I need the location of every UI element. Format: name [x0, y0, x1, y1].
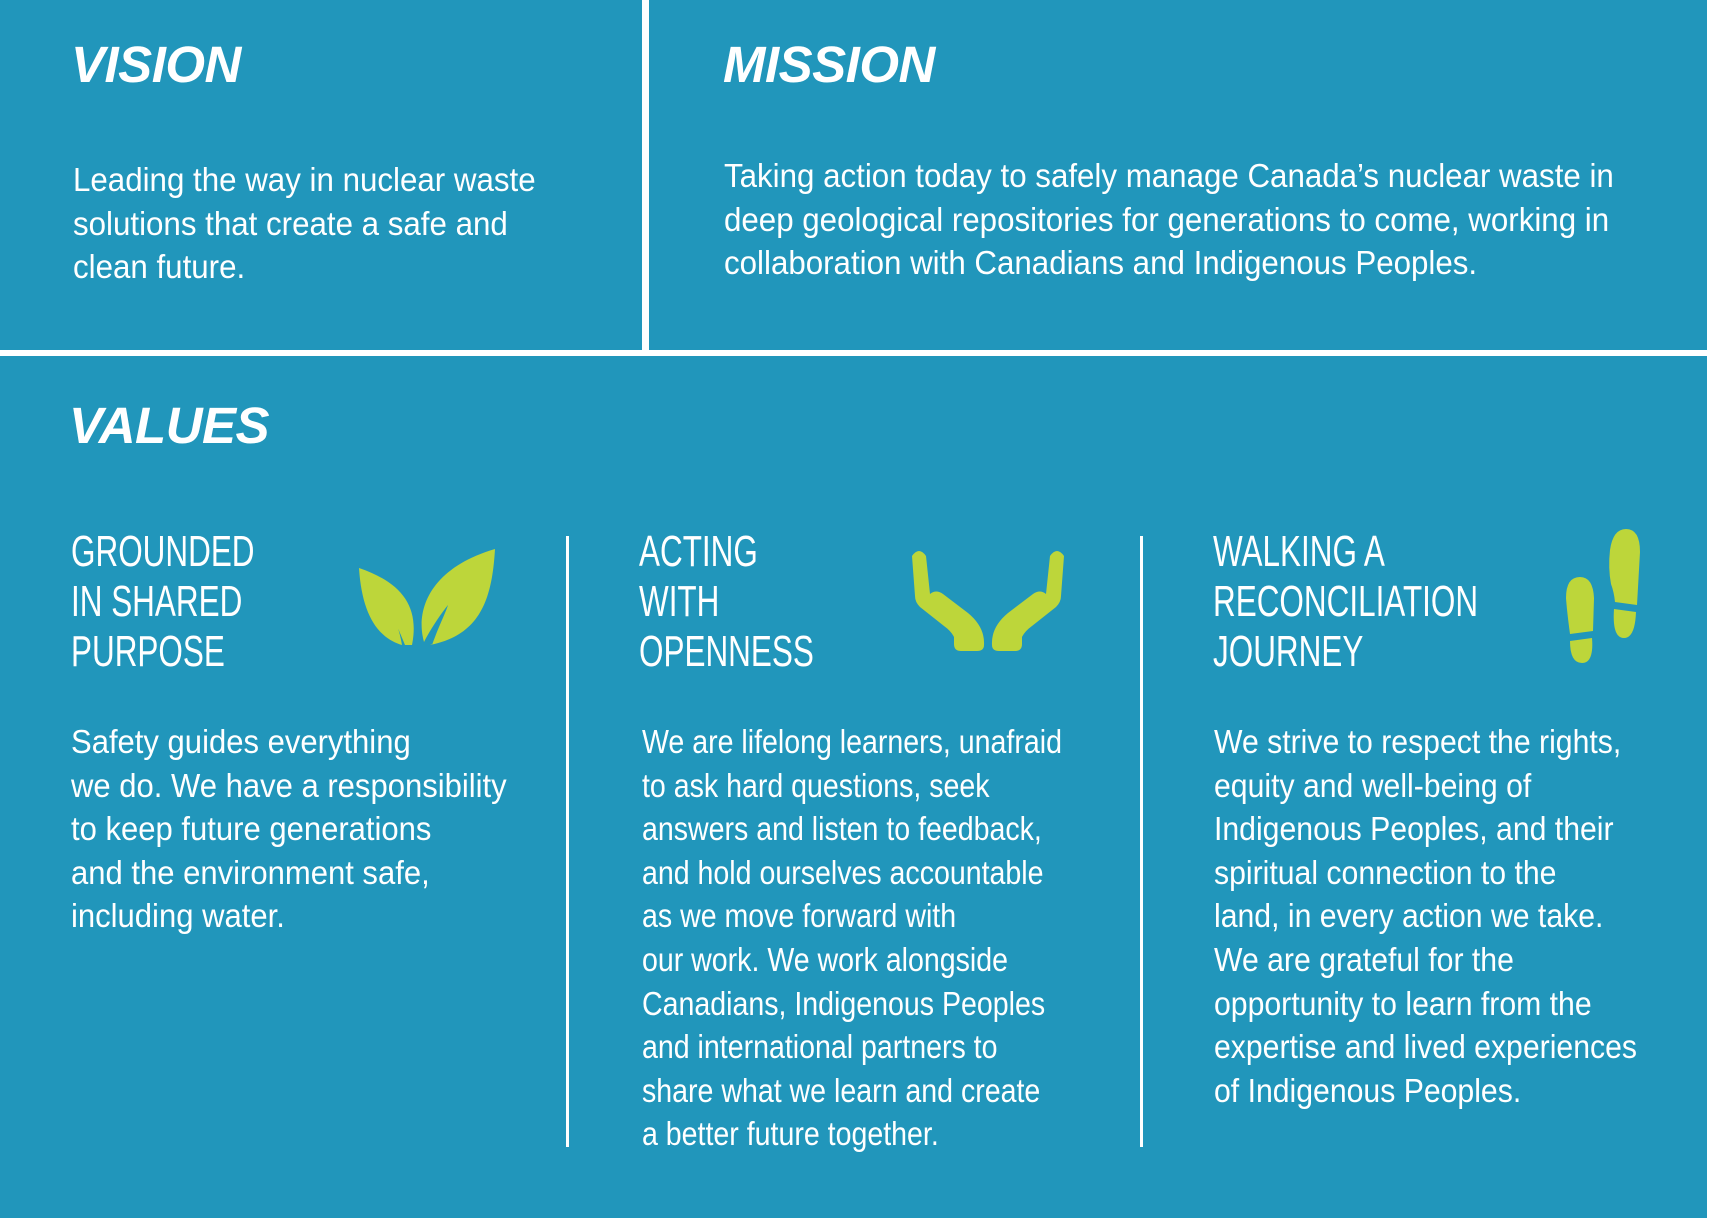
- text: acting: We are lifelong learners, unafraid: [642, 723, 1062, 760]
- text: acting: and hold ourselves accountable: [642, 854, 1044, 891]
- heading: grounded: PURPOSE: [71, 627, 225, 676]
- text: acting: and international partners to: [642, 1028, 997, 1065]
- heading: grounded: [71, 527, 255, 676]
- icon: leaves: [359, 549, 495, 645]
- text: walking: Indigenous Peoples, and their: [1214, 810, 1614, 847]
- mission text: [724, 157, 1614, 281]
- heading: grounded: GROUNDED: [71, 527, 255, 576]
- text: walking: [1214, 723, 1637, 1109]
- text: walking: opportunity to learn from the: [1214, 985, 1592, 1022]
- text: acting: our work. We work alongside: [642, 941, 1008, 978]
- title: values: VALUES: [69, 397, 269, 454]
- text: grounded: and the environment safe,: [71, 854, 430, 891]
- text: walking: of Indigenous Peoples.: [1214, 1072, 1521, 1109]
- heading: walking: RECONCILIATION: [1213, 577, 1478, 626]
- vertical divider top: [642, 0, 649, 352]
- text: walking: equity and well-being of: [1214, 767, 1531, 804]
- title: mission: MISSION: [723, 36, 935, 93]
- heading: walking: JOURNEY: [1213, 627, 1363, 676]
- mission text: deep geological repositories for generations to come, working in: [724, 201, 1609, 238]
- horizontal divider: [0, 350, 1709, 356]
- heading: walking: [1213, 527, 1478, 676]
- icon: footprints: [1566, 529, 1640, 663]
- text: walking: land, in every action we take.: [1214, 897, 1603, 934]
- heading: acting: OPENNESS: [639, 627, 814, 676]
- text: walking: We are grateful for the: [1214, 941, 1514, 978]
- vision text: solutions that create a safe and: [73, 205, 508, 242]
- text: acting: [642, 723, 1062, 1152]
- text: walking: spiritual connection to the: [1214, 854, 1556, 891]
- column divider 2: [1140, 536, 1143, 1147]
- text: grounded: we do. We have a responsibility: [71, 767, 507, 804]
- mission text: Taking action today to safely manage Canada’s nuclear waste in: [724, 157, 1614, 194]
- text: acting: as we move forward with: [642, 897, 956, 934]
- text: walking: expertise and lived experiences: [1214, 1028, 1637, 1065]
- text: grounded: including water.: [71, 897, 285, 934]
- title: vision: VISION: [71, 36, 241, 93]
- column divider 1: [566, 536, 569, 1147]
- text: acting: Canadians, Indigenous Peoples: [642, 985, 1045, 1022]
- heading: acting: [639, 527, 814, 676]
- vision text: clean future.: [73, 248, 245, 285]
- icon: hands: [912, 551, 1064, 651]
- heading: walking: WALKING A: [1213, 527, 1385, 576]
- vision text: Leading the way in nuclear waste: [73, 161, 536, 198]
- heading: grounded: IN SHARED: [71, 577, 242, 626]
- text: acting: share what we learn and create: [642, 1072, 1040, 1109]
- heading: acting: WITH: [639, 577, 719, 626]
- text: walking: We strive to respect the rights,: [1214, 723, 1621, 760]
- vision text: [73, 161, 536, 285]
- text: grounded: to keep future generations: [71, 810, 431, 847]
- mission text: collaboration with Canadians and Indigenous Peoples.: [724, 244, 1477, 281]
- text: grounded: [71, 723, 507, 934]
- text: acting: a better future together.: [642, 1115, 939, 1152]
- text: grounded: Safety guides everything: [71, 723, 411, 760]
- text: acting: answers and listen to feedback,: [642, 810, 1042, 847]
- text: acting: to ask hard questions, seek: [642, 767, 990, 804]
- heading: acting: ACTING: [639, 527, 758, 576]
